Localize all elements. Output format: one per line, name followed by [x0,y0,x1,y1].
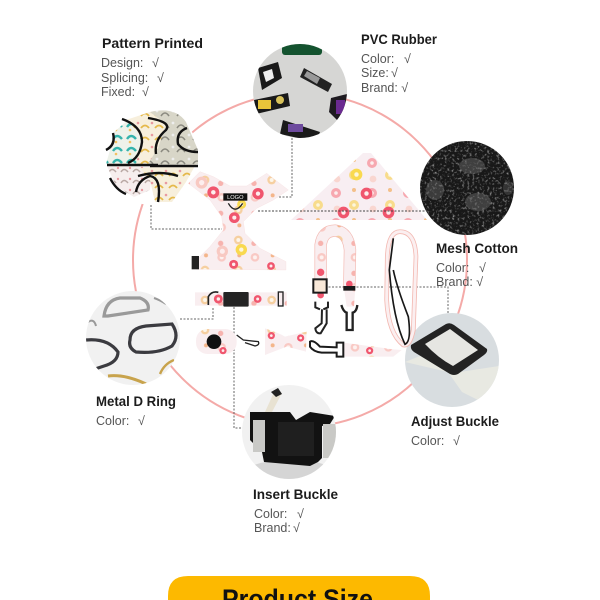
label: insert buckle: Insert Buckle [253,486,338,502]
middle cream vest [126,112,166,164]
panel: metal D ring photo [86,291,180,385]
purple patch [329,94,347,120]
label: metal D ring: √ [138,414,145,428]
lower left vest [107,166,152,197]
label: metal D ring: Color: [96,414,129,428]
label: adjust buckle: Adjust Buckle [411,413,499,429]
label: PVC rubber: Size: [361,66,389,80]
label: insert buckle: √ [297,507,304,521]
label: pattern printed: Splicing: [101,71,148,85]
product size button [168,576,430,600]
buckle body [250,412,335,466]
label: pattern printed: √ [157,71,164,85]
label: PVC rubber: Color: [361,52,394,66]
purple TF badge [280,120,320,138]
label: insert buckle: √ [293,521,300,535]
panel: pattern printed photo [105,109,199,205]
label: metal D ring [96,393,176,428]
black square patch [258,62,282,90]
infographic canvas [86,34,518,600]
label: pattern printed: Fixed: [101,85,135,99]
dashed leader lines [151,138,448,428]
green patch [282,44,322,55]
strap at top [265,392,282,412]
right grey vest [146,110,198,166]
label: insert buckle: Color: [254,507,287,521]
black D ring [130,324,176,352]
label: pattern printed: Pattern Printed [102,35,203,51]
label: insert buckle [253,486,338,535]
label: adjust buckle [411,413,499,448]
short leash [310,341,402,357]
label: PVC rubber: √ [391,66,398,80]
label: metal D ring: Metal D Ring [96,393,176,409]
label: mesh cotton: Color: [436,261,469,275]
left dark D ring [86,340,118,372]
pink connecting ring [133,93,467,427]
label: pattern printed: √ [152,56,159,70]
label: pattern printed [101,35,203,99]
label: PVC rubber [361,31,438,95]
poop bag holder [196,329,259,354]
panel: insert buckle photo [242,385,336,484]
label: PVC rubber: Brand: √ [361,81,408,95]
left teal vest [106,120,142,164]
bow tie [265,328,307,355]
long leash [387,232,416,345]
label: mesh cotton [436,240,518,289]
label: PVC rubber: PVC Rubber [361,31,438,47]
label: adjust buckle: √ [453,434,460,448]
label: pattern printed: Design: [101,56,143,70]
collar [195,292,287,307]
label: insert buckle: Brand: [254,521,291,535]
label: mesh cotton: Mesh Cotton [436,240,518,256]
label: adjust buckle: Color: [411,434,444,448]
silver D ring [104,298,148,316]
label: pattern printed: √ [142,85,149,99]
bandana [258,153,428,220]
panel: mesh cotton photo [420,141,514,235]
pale webbing [405,356,499,400]
black piping [106,118,198,202]
white backing [105,109,199,205]
harness with donut print [188,172,288,270]
panel: adjust buckle photo [405,313,499,407]
logo label: LOGO [227,195,244,201]
lower yellow vest [140,164,196,202]
angled grey badge [300,68,332,92]
panel: PVC rubber photo [253,42,347,142]
webbing [253,420,265,452]
yellow TF badge [254,93,290,114]
buckle frame [411,323,487,375]
label: mesh cotton: √ [479,261,486,275]
label: mesh cotton: Brand: √ [436,275,483,289]
gold ring [108,376,146,384]
car seat belt leash [313,231,357,333]
label: PVC rubber: √ [404,52,411,66]
